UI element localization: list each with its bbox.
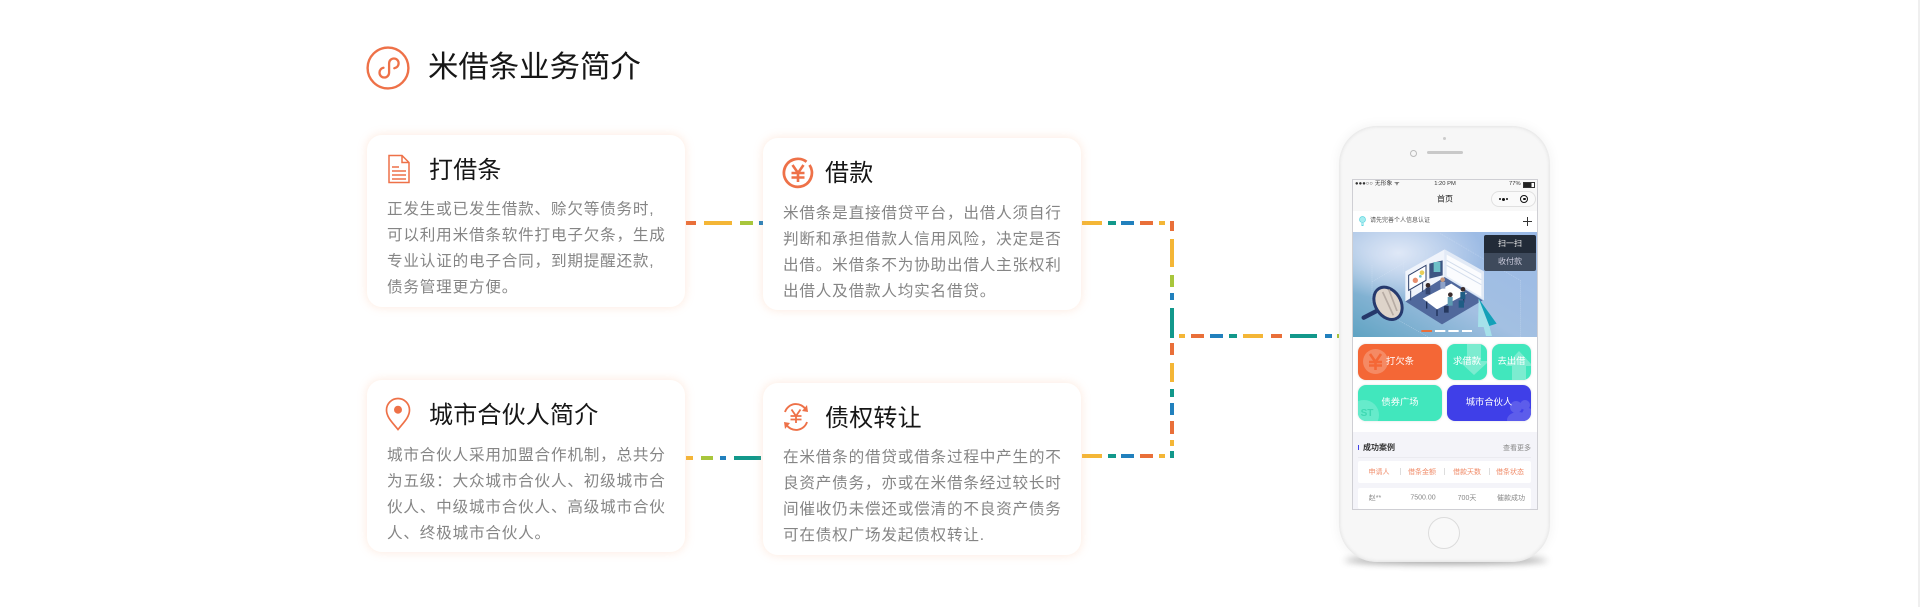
text: 债权转让 description: 在米借条的借贷或借条过程中产生的不 (783, 449, 1062, 466)
icon: location pin (386, 398, 410, 431)
table header row: 借条状态 (1496, 469, 1524, 476)
text: 打借条 description: 专业认证的电子合同，到期提醒还款, (387, 253, 654, 270)
text: 债权转让 description: 可在债权广场发起债权转让. (783, 527, 985, 544)
icon: mini program logo (366, 46, 410, 90)
status bar (1353, 180, 1537, 211)
status bar: 77% (1509, 181, 1521, 187)
status bar: 1:20 PM (1434, 181, 1456, 187)
heading: 城市合伙人简介: 城市合伙人简介 (429, 402, 598, 429)
text: 借款 description: 出借人及借款人均实名借贷。 (783, 283, 996, 300)
tile: 打欠条: 打欠条 (1386, 356, 1414, 366)
text: 债权转让 description: 间催收仍未偿还或偿清的不良资产债务 (783, 501, 1062, 518)
tile: 债券广场: 债券广场 (1381, 397, 1419, 407)
phone screen (1352, 179, 1538, 510)
banner illustration (1353, 232, 1537, 337)
panel: 城市合伙人简介 (367, 380, 685, 552)
notice row: 请先完善个人信息认证 (1370, 218, 1430, 224)
tile: 求借款 (1447, 344, 1487, 380)
text: 借款 description: 判断和承担借款人信用风险，决定是否 (783, 231, 1062, 248)
popup menu: 扫一扫 (1498, 239, 1522, 248)
phone mockup (1339, 126, 1550, 568)
notice row (1353, 211, 1537, 232)
icon: document (388, 154, 410, 184)
text: 城市合伙人简介 description: 伙人、中级城市合伙人、高级城市合伙 (387, 499, 666, 516)
table data row: 7500.00 (1410, 494, 1436, 502)
text: 城市合伙人简介 description (387, 446, 666, 542)
tile: 去出借 (1492, 344, 1531, 380)
text: 借款 description (783, 204, 1062, 300)
status bar: ●●●○○ 无形象 ᯤ (1355, 181, 1400, 187)
table header row: 申请人 (1368, 469, 1390, 476)
section header: 查看更多 (1503, 445, 1531, 452)
popup menu: 收付款 (1498, 257, 1522, 266)
text: 城市合伙人简介 description: 人、终极城市合伙人。 (387, 525, 551, 542)
text: 打借条 description: 债务管理更方便。 (387, 279, 518, 296)
table header row: 借款天数 (1453, 469, 1481, 476)
text: 城市合伙人简介 description: 城市合伙人采用加盟合作机制，总共分 (387, 447, 666, 464)
table data row: 700天 (1458, 495, 1476, 502)
text: 债权转让 description: 良资产债务，亦或在米借条经过较长时 (783, 475, 1062, 492)
title block (366, 46, 641, 90)
capsule button (1491, 191, 1536, 207)
tile: 求借款: 求借款 (1453, 356, 1481, 366)
phone home button (1428, 517, 1460, 549)
table data row: 催款成功 (1497, 495, 1525, 502)
table data row: 赵** (1369, 495, 1381, 502)
navigation bar title: 首页 (1437, 194, 1453, 204)
icon: yuan exchange (784, 403, 808, 431)
heading: 米借条业务简介 (428, 50, 641, 84)
popup menu (1484, 235, 1536, 271)
text: 城市合伙人简介 description: 为五级：大众城市合伙人、初级城市合 (387, 473, 666, 490)
panel: 借款 (763, 138, 1081, 310)
tile: 城市合伙人 (1447, 385, 1531, 421)
phone ground shadow (1344, 557, 1548, 564)
success cases section (1353, 432, 1537, 509)
panel: 债权转让 (763, 383, 1081, 555)
table data row (1358, 488, 1531, 509)
tile: 去出借: 去出借 (1498, 356, 1525, 366)
table header row: 借条金额 (1408, 469, 1436, 476)
phone camera and speaker (1410, 137, 1463, 157)
text: 借款 description: 米借条是直接借贷平台，出借人须自行 (783, 205, 1062, 222)
heading: 债权转让: 债权转让 (825, 405, 922, 432)
text: 借款 description: 出借。米借条不为协助出借人主张权利 (783, 257, 1062, 274)
text: 打借条 description: 正发生或已发生借款、赊欠等债务时, (387, 201, 654, 218)
section header (1358, 443, 1531, 458)
text: 债权转让 description (783, 448, 1062, 544)
right edge strip (1918, 0, 1920, 607)
text: 打借条 description: 可以利用米借条软件打电子欠条，生成 (387, 227, 666, 244)
tile: 债券广场: ST (1361, 408, 1373, 419)
tile: 打欠条 (1358, 344, 1442, 380)
tile: 城市合伙人: 城市合伙人 (1466, 397, 1512, 407)
heading: 打借条: 打借条 (429, 157, 502, 184)
tile: 债券广场 (1358, 385, 1442, 421)
text: 打借条 description (387, 200, 666, 296)
phone body (1339, 126, 1550, 562)
table header row (1358, 461, 1531, 483)
heading: 借款: 借款 (825, 160, 873, 187)
section header: 成功案例 (1363, 443, 1395, 452)
panel: 打借条 (367, 135, 685, 307)
icon: yuan coin (782, 158, 814, 188)
